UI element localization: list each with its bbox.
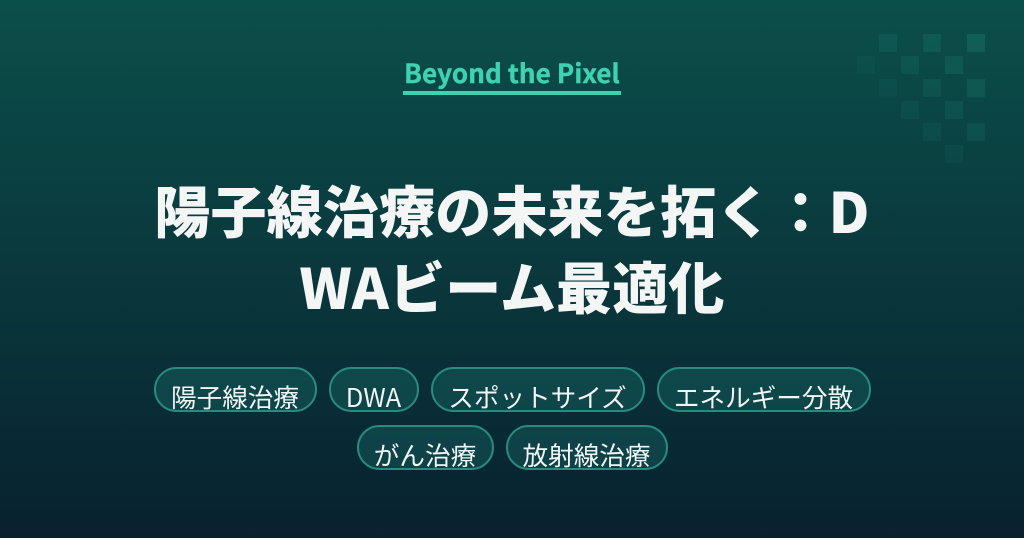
- tag: エネルギー分散: エネルギー分散: [674, 378, 853, 415]
- title: 陽子線治療の未来を拓く：D: [154, 169, 870, 250]
- tag: DWA: [329, 367, 419, 412]
- tag: エネルギー分散: [657, 367, 871, 412]
- tag: がん治療: [357, 425, 494, 470]
- decorative pixel pattern: [879, 34, 985, 141]
- tag: 陽子線治療: 陽子線治療: [171, 378, 299, 415]
- tag: がん治療: がん治療: [374, 436, 476, 473]
- tag: 放射線治療: 放射線治療: [522, 436, 650, 473]
- tag: 陽子線治療: [154, 367, 317, 412]
- tag: スポットサイズ: スポットサイズ: [448, 378, 627, 415]
- brand label: Beyond the Pixel: [404, 54, 620, 91]
- tag: スポットサイズ: [431, 367, 645, 412]
- tag: 放射線治療: [506, 425, 668, 470]
- title: [154, 169, 870, 326]
- title: WAビーム最適化: [299, 245, 725, 326]
- tag: DWA: DWA: [346, 378, 401, 415]
